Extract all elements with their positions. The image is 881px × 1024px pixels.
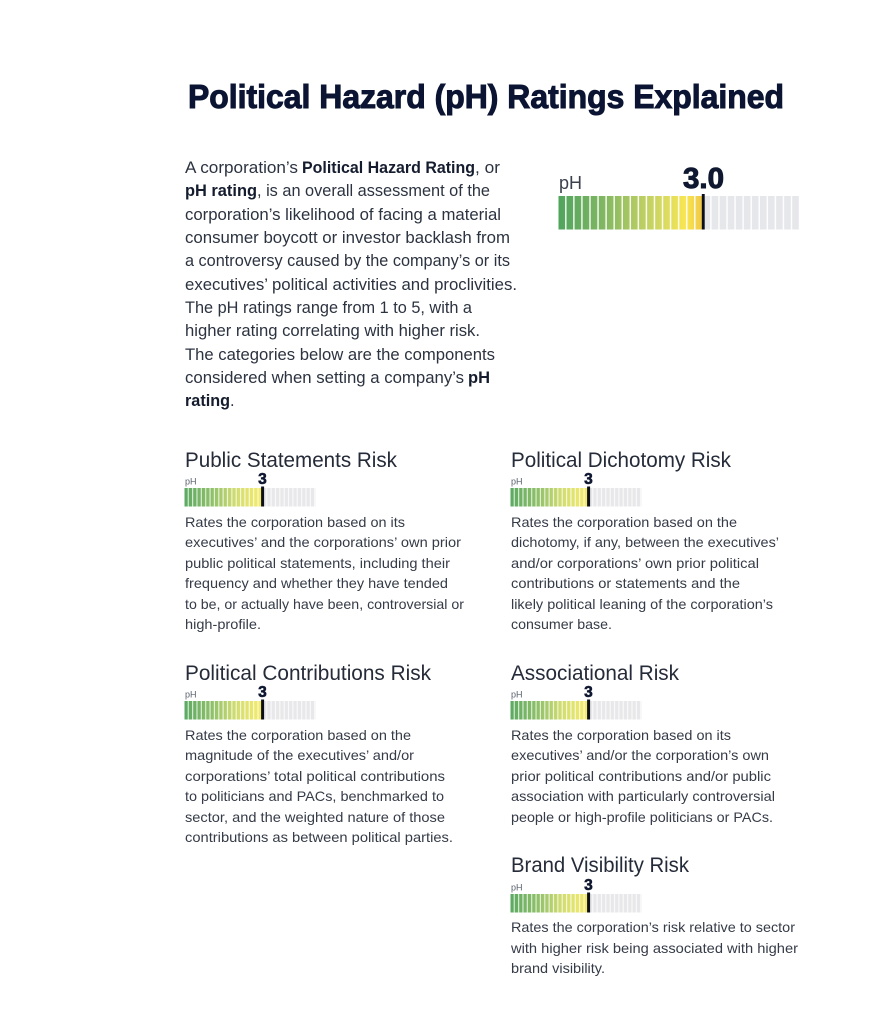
intro text block: The categories below are the components: [185, 346, 495, 364]
rating gauge: [510, 471, 642, 506]
description: [185, 728, 453, 845]
title: Political Hazard (pH) Ratings Explained: [188, 78, 784, 115]
heading: Associational Risk: [511, 662, 679, 685]
description: [185, 515, 464, 632]
rating gauge: pH: [511, 476, 523, 486]
description: contributions as between political parties.: [185, 830, 453, 845]
description: to politicians and PACs, benchmarked to: [185, 789, 444, 804]
rating gauge: [184, 471, 316, 506]
description: high-profile.: [185, 617, 261, 632]
rating gauge: pH: [511, 690, 523, 700]
intro text block: pH: [468, 369, 490, 387]
description: association with particularly controversial: [511, 789, 775, 804]
intro text block: Political Hazard Rating: [302, 159, 475, 177]
description: magnitude of the executives’ and/or: [185, 748, 415, 763]
rating gauge: 3: [584, 877, 593, 894]
intro text block: higher rating correlating with higher risk.: [185, 322, 480, 340]
description: with higher risk being associated with higher: [510, 941, 798, 956]
description: Rates the corporation based on the: [185, 728, 411, 743]
description: Rates the corporation based on the: [511, 515, 737, 530]
heading: Political Contributions Risk: [185, 662, 431, 685]
gauge value: 3.0: 3.0: [683, 163, 724, 195]
panel: political dichotomy risk: [510, 449, 779, 632]
description: public political statements, including their: [185, 556, 451, 571]
panel: brand visibility risk: [510, 854, 798, 976]
description: frequency and whether they have tended: [185, 576, 448, 591]
description: brand visibility.: [511, 961, 605, 976]
description: executives’ and the corporations’ own prior: [185, 535, 462, 550]
description: Rates the corporation’s risk relative to sector: [511, 920, 795, 935]
rating gauge: pH: [185, 690, 197, 700]
description: and/or corporations’ own prior political: [511, 556, 759, 571]
gauge bar: [558, 194, 800, 230]
rating gauge: pH: [185, 476, 197, 486]
description: consumer base.: [511, 617, 612, 632]
description: to be, or actually have been, controversial or: [185, 597, 464, 612]
rating gauge: [184, 684, 316, 720]
description: contributions or statements and the: [511, 576, 740, 591]
rating gauge: [510, 877, 642, 912]
intro text block: , is an overall assessment of the: [257, 182, 490, 200]
description: dichotomy, if any, between the executives’: [511, 535, 779, 550]
intro text block: corporation’s likelihood of facing a material: [185, 206, 501, 224]
heading: Political Dichotomy Risk: [511, 449, 731, 472]
intro text block: [185, 159, 517, 410]
description: corporations’ total political contributions: [185, 769, 445, 784]
description: likely political leaning of the corporation’s: [511, 597, 773, 612]
description: executives’ and/or the corporation’s own: [511, 748, 769, 763]
intro text block: a controversy caused by the company’s or its: [185, 252, 510, 270]
description: [511, 728, 775, 825]
description: [511, 515, 779, 632]
intro text block: rating: [185, 392, 230, 410]
rating gauge: 3: [584, 684, 593, 701]
panel: associational risk: [510, 662, 775, 825]
heading: Brand Visibility Risk: [511, 854, 689, 877]
gauge label: pH: pH: [559, 173, 582, 193]
description: Rates the corporation based on its: [185, 515, 405, 530]
description: [510, 920, 798, 976]
intro text block: , or: [475, 159, 501, 177]
heading: Public Statements Risk: [185, 449, 397, 472]
description: prior political contributions and/or public: [511, 769, 771, 784]
intro text block: executives’ political activities and proclivities.: [185, 276, 517, 294]
panel: public statements risk: [184, 449, 464, 632]
main pH gauge: [558, 163, 800, 230]
rating gauge: 3: [258, 684, 267, 701]
rating gauge: 3: [584, 471, 593, 488]
rating gauge: [510, 684, 642, 720]
rating gauge: pH: [511, 882, 523, 892]
intro text block: pH rating: [185, 182, 257, 200]
rating gauge: 3: [258, 471, 267, 488]
description: sector, and the weighted nature of those: [185, 810, 445, 825]
description: Rates the corporation based on its: [511, 728, 731, 743]
panel: political contributions risk: [184, 662, 453, 845]
intro text block: .: [230, 392, 235, 410]
intro text block: consumer boycott or investor backlash from: [185, 229, 510, 247]
description: people or high-profile politicians or PACs.: [511, 810, 773, 825]
intro text block: considered when setting a company’s: [185, 369, 464, 387]
intro text block: A corporation’s: [185, 159, 298, 177]
intro text block: The pH ratings range from 1 to 5, with a: [185, 299, 473, 317]
